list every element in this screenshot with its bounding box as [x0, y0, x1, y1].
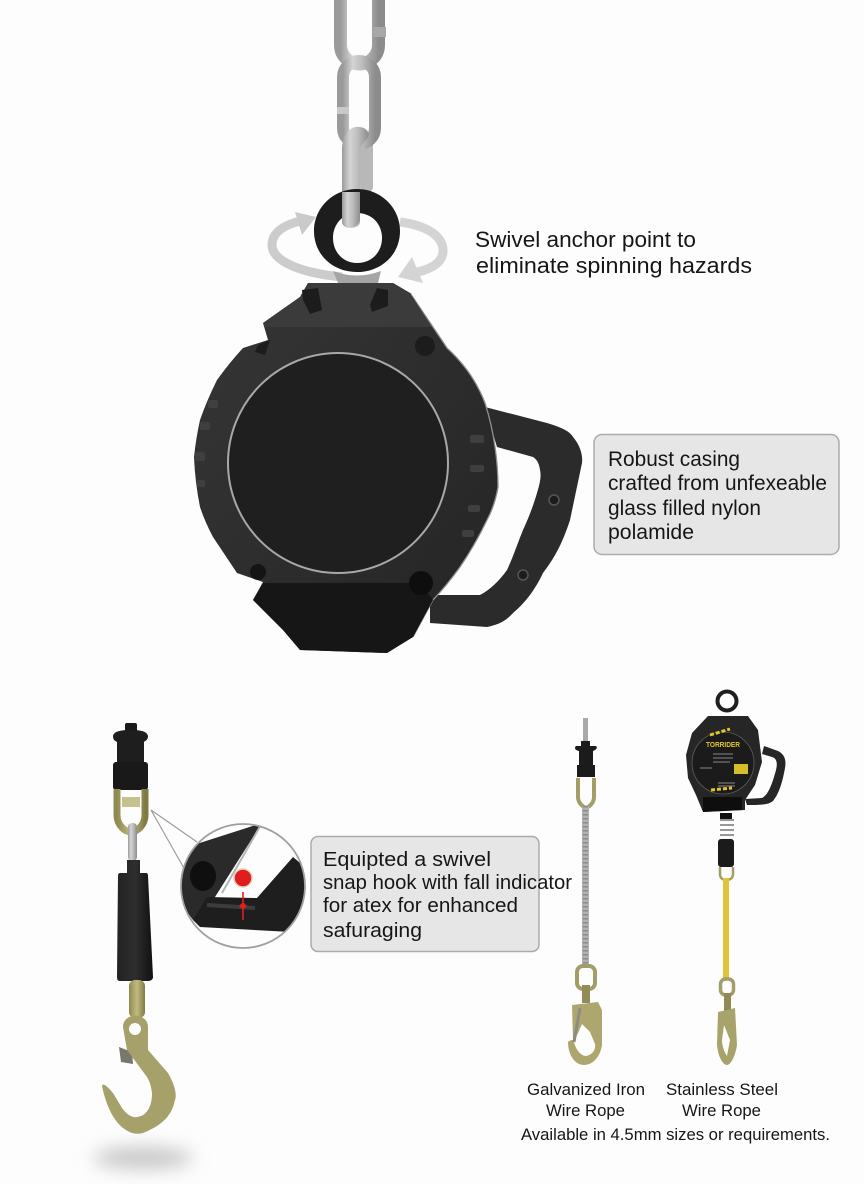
steel chain	[337, 0, 386, 228]
handle screws	[518, 495, 559, 580]
label: galvanized iron wire rope	[527, 1081, 645, 1120]
label: galvanized iron wire rope: Wire Rope	[546, 1102, 625, 1120]
text: swivel anchor point: Swivel anchor point to	[475, 227, 696, 252]
anchor ring	[314, 189, 400, 283]
label: galvanized iron wire rope: Galvanized Iron	[527, 1081, 645, 1099]
yellow rope	[723, 878, 729, 980]
connector top	[113, 723, 148, 790]
spring	[720, 820, 734, 835]
red indicator	[234, 869, 252, 920]
label: stainless steel wire rope: Stainless Steel	[666, 1081, 778, 1099]
bottom block	[253, 583, 433, 653]
callout: snap hook: Equipted a swivel	[323, 848, 491, 871]
callout: robust casing: crafted from unfexeable	[608, 471, 827, 495]
rubber sleeve	[117, 860, 153, 981]
top plate	[263, 283, 432, 327]
callout: robust casing: polamide	[608, 520, 694, 544]
label: stainless steel wire rope: Wire Rope	[682, 1102, 761, 1120]
swivel arrows	[272, 212, 443, 283]
note: available sizes: Available in 4.5mm sizes or requirements.	[521, 1126, 830, 1144]
dial	[228, 353, 448, 573]
text: swivel anchor point	[475, 227, 752, 278]
casing	[194, 283, 498, 653]
snap hook assembly	[93, 723, 193, 1169]
callout: robust casing: Robust casing	[608, 447, 740, 471]
gold swivel	[117, 789, 145, 832]
ground shadow	[93, 1147, 193, 1169]
handle	[430, 407, 582, 627]
callout: snap hook: safuraging	[323, 919, 422, 942]
label: stainless steel wire rope	[666, 1081, 778, 1120]
galvanized wire rope product	[568, 718, 602, 1065]
callout: robust casing: glass filled nylon	[608, 496, 761, 520]
grip ribs	[195, 400, 484, 537]
silver link	[128, 823, 137, 861]
callout: robust casing	[594, 434, 839, 554]
top lugs	[250, 288, 435, 595]
yellow hazard stripes	[710, 729, 732, 790]
callout: snap hook: snap hook with fall indicator	[323, 871, 572, 894]
stainless steel wire rope product: TORRIDER	[706, 740, 741, 749]
main retractable device with chain	[194, 0, 582, 653]
gold hook	[102, 980, 176, 1134]
text: swivel anchor point: eliminate spinning hazards	[476, 253, 752, 278]
stainless steel wire rope product	[686, 692, 785, 1065]
magnifier: fall indicator	[151, 810, 312, 948]
callout: snap hook	[311, 836, 572, 952]
callout: snap hook: for atex for enhanced	[323, 894, 518, 917]
